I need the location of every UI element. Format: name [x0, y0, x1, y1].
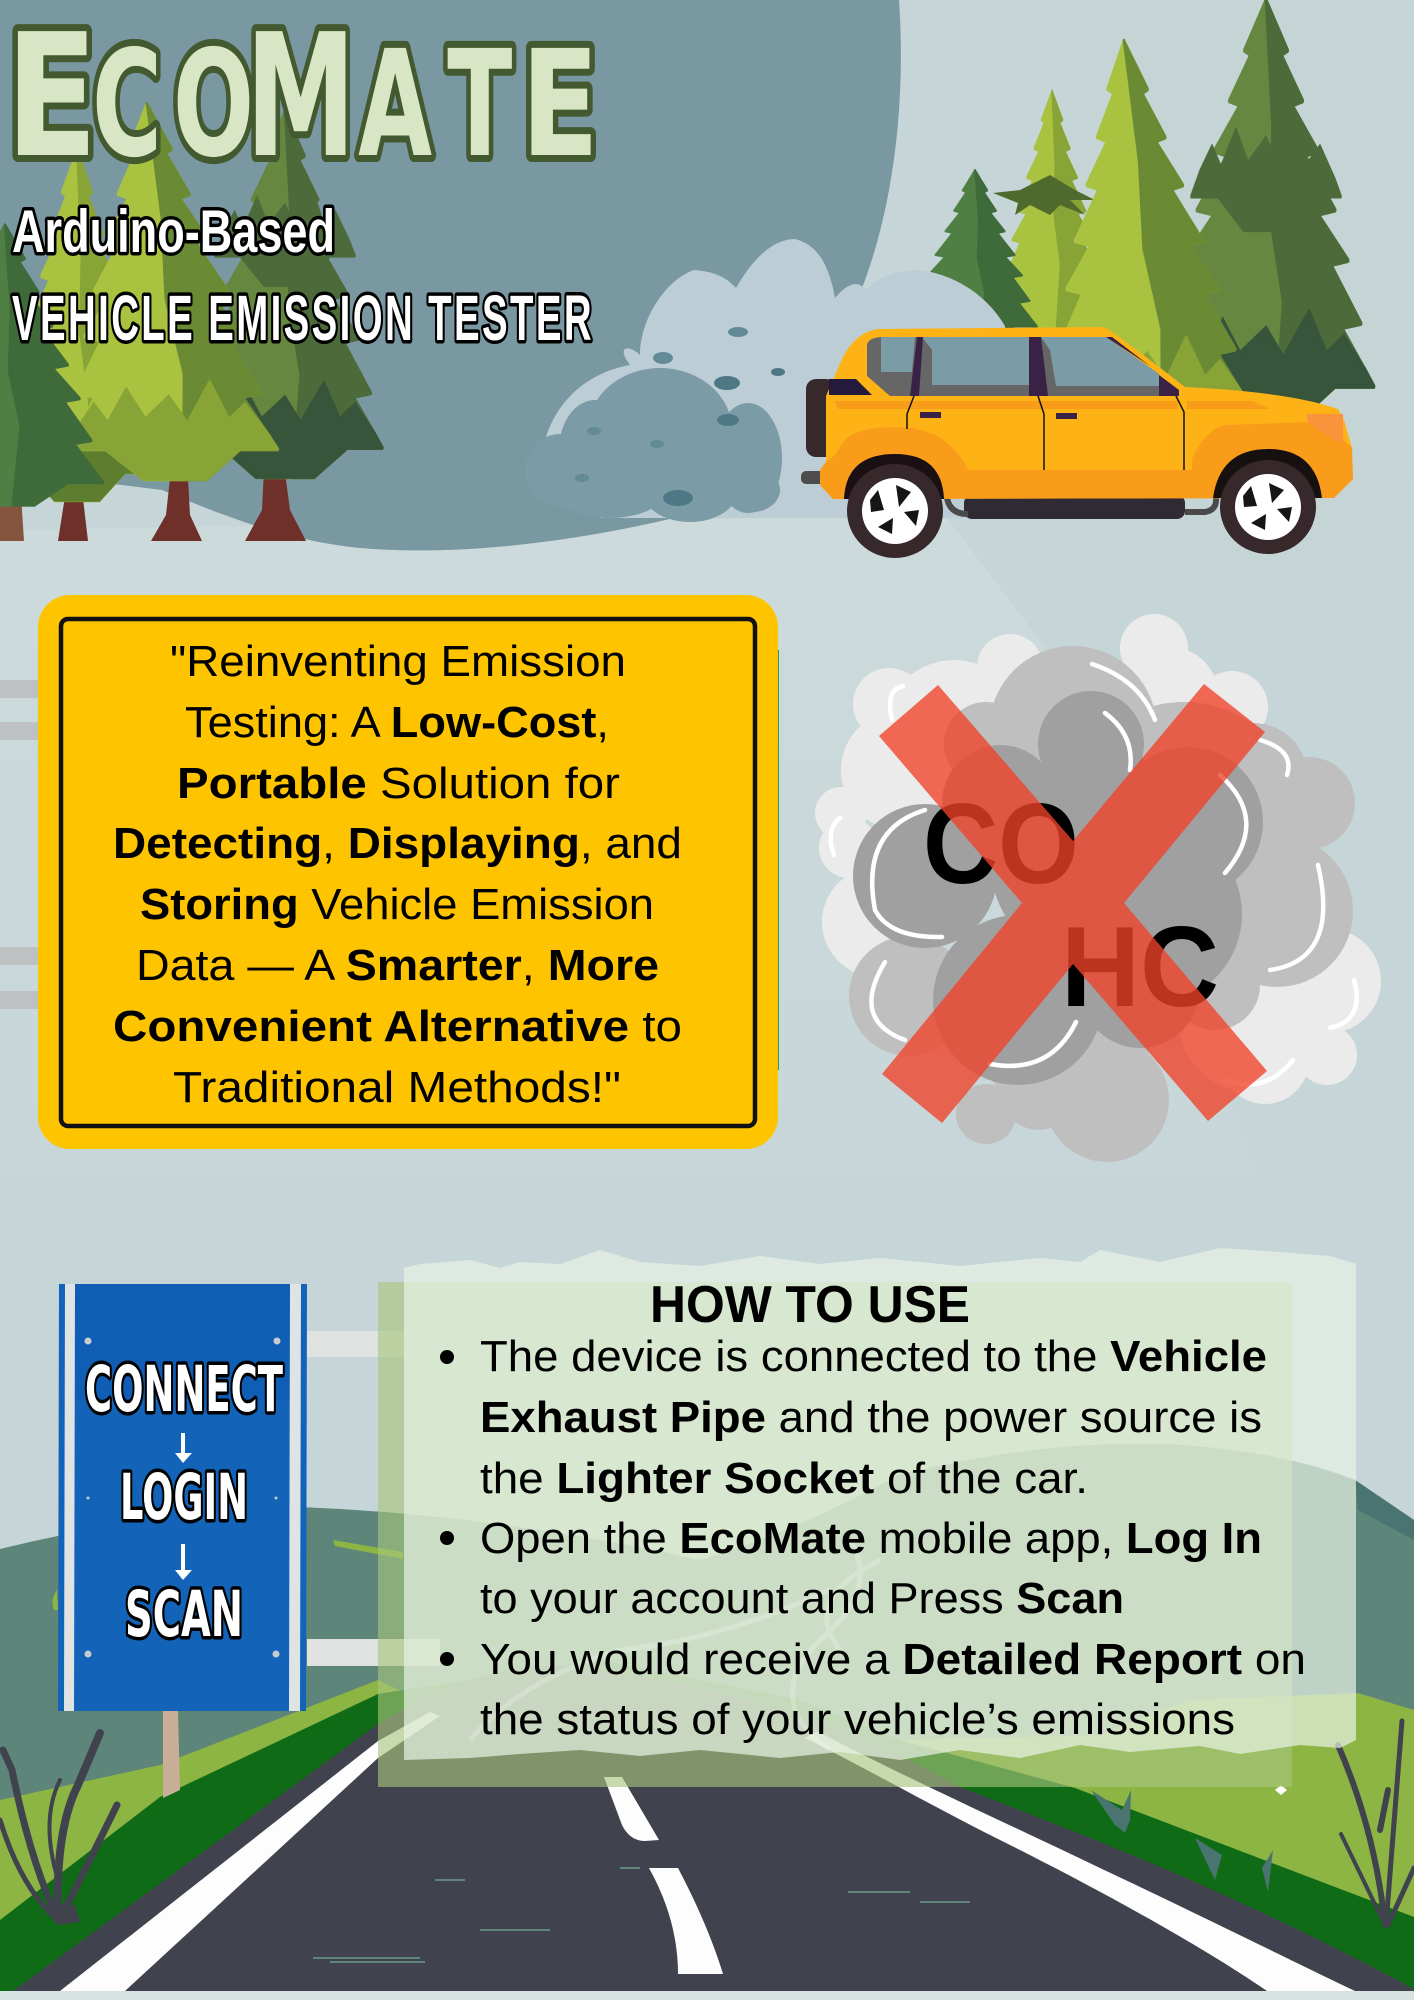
title: A [358, 20, 432, 191]
green streak behind sign [333, 1540, 403, 1559]
sign brackets [307, 1331, 440, 1666]
quote text: Detecting, Displaying, and [113, 819, 682, 868]
road dash 1 [604, 1777, 659, 1841]
exhaust cloud light [545, 239, 1005, 518]
title: M [246, 0, 356, 195]
blue sign post [163, 1711, 180, 1798]
light grass [0, 1680, 1414, 2000]
car [801, 327, 1353, 558]
arrow down 1 [175, 1433, 192, 1463]
car front wheel [1213, 449, 1322, 554]
exhaust cloud dark [525, 368, 782, 522]
grass tufts [1091, 1790, 1273, 1892]
quote text: Storing Vehicle Emission [140, 880, 654, 929]
instruction text: Open the EcoMate mobile app, Log In [480, 1514, 1262, 1563]
step: scan: SCAN [125, 1578, 243, 1651]
subtitle line 1: Arduino-Based [12, 198, 335, 265]
quote text: "Reinventing Emission [170, 637, 626, 686]
quote text: Portable Solution for [177, 759, 620, 808]
instruction text: the Lighter Socket of the car. [480, 1454, 1088, 1503]
subtitle line 2: VEHICLE EMISSION TESTER [12, 282, 594, 354]
car exhaust pipe [801, 471, 825, 484]
sign brackets left [0, 680, 38, 1009]
label: CO: CO [923, 781, 1079, 908]
smoke highlights [831, 664, 1357, 1084]
right shrub [1338, 1721, 1414, 1925]
cloud spots [575, 327, 785, 506]
road marks [313, 1868, 970, 1962]
title: O [173, 20, 254, 191]
left shrub [0, 1733, 117, 1920]
shrub base [40, 1905, 80, 1925]
car rear wheel [844, 454, 944, 558]
title: E [521, 20, 599, 191]
brushed light panel [404, 1248, 1356, 1760]
title: C [92, 20, 162, 191]
blue sign [58, 1284, 307, 1711]
yellow quote sign [38, 595, 778, 1149]
quote text: Convenient Alternative to [113, 1002, 682, 1051]
bullets [440, 1350, 454, 1666]
landscape [0, 1444, 1414, 2000]
instruction text: You would receive a Detailed Report on [480, 1635, 1306, 1684]
car body [820, 327, 1353, 499]
left tree group [0, 104, 382, 541]
heading: HOW TO USE [650, 1276, 970, 1334]
car windows [829, 337, 1179, 396]
car headlight [1307, 414, 1343, 444]
label: HC: HC [1061, 904, 1219, 1031]
car lower body shade [820, 422, 1353, 499]
step: connect: CONNECT [85, 1353, 283, 1426]
bottom strip [0, 1991, 1414, 2000]
instruction text: the status of your vehicle’s emissions [480, 1695, 1235, 1744]
instruction text: The device is connected to the Vehicle [480, 1332, 1267, 1381]
title: E [6, 0, 98, 195]
road left line [60, 1712, 440, 1991]
smoke cloud [815, 614, 1381, 1162]
road dash 2 [649, 1868, 723, 1974]
red cross [879, 684, 1267, 1123]
far hill [0, 1444, 1414, 1900]
instruction text: Exhaust Pipe and the power source is [480, 1393, 1262, 1442]
small leaf [53, 1590, 58, 1610]
dark hill behind title [0, 0, 901, 550]
car door handles [920, 412, 1077, 419]
dark grass [0, 1660, 1414, 2000]
hill shade [1355, 1480, 1414, 1540]
quote text [113, 637, 682, 1112]
title [6, 0, 599, 195]
green edge of yellow sign [777, 650, 779, 1070]
right tree group [913, 0, 1374, 441]
road right line [805, 1731, 1355, 1991]
car spare wheel [806, 379, 836, 457]
green backing panel [378, 1282, 1292, 1787]
quote text: Data — A Smarter, More [136, 941, 659, 990]
car side strip [835, 401, 1270, 409]
quote text: Testing: A Low-Cost, [185, 698, 609, 747]
small white mark [1275, 1785, 1287, 1795]
background upper right facet [1050, 0, 1414, 620]
arrow down 2 [175, 1544, 192, 1580]
ghost road lines [470, 1540, 880, 1750]
screws [84, 1338, 280, 1658]
background light facet [0, 515, 1300, 1300]
car door lines [907, 396, 1184, 470]
road [13, 1666, 1414, 1991]
instruction text: to your account and Press Scan [480, 1574, 1124, 1623]
step: login: LOGIN [120, 1461, 248, 1534]
quote text: Traditional Methods!" [173, 1063, 621, 1112]
instruction text [480, 1332, 1306, 1744]
panel: how to use [378, 1248, 1356, 1787]
car chassis [947, 495, 1216, 519]
title: T [447, 20, 512, 191]
